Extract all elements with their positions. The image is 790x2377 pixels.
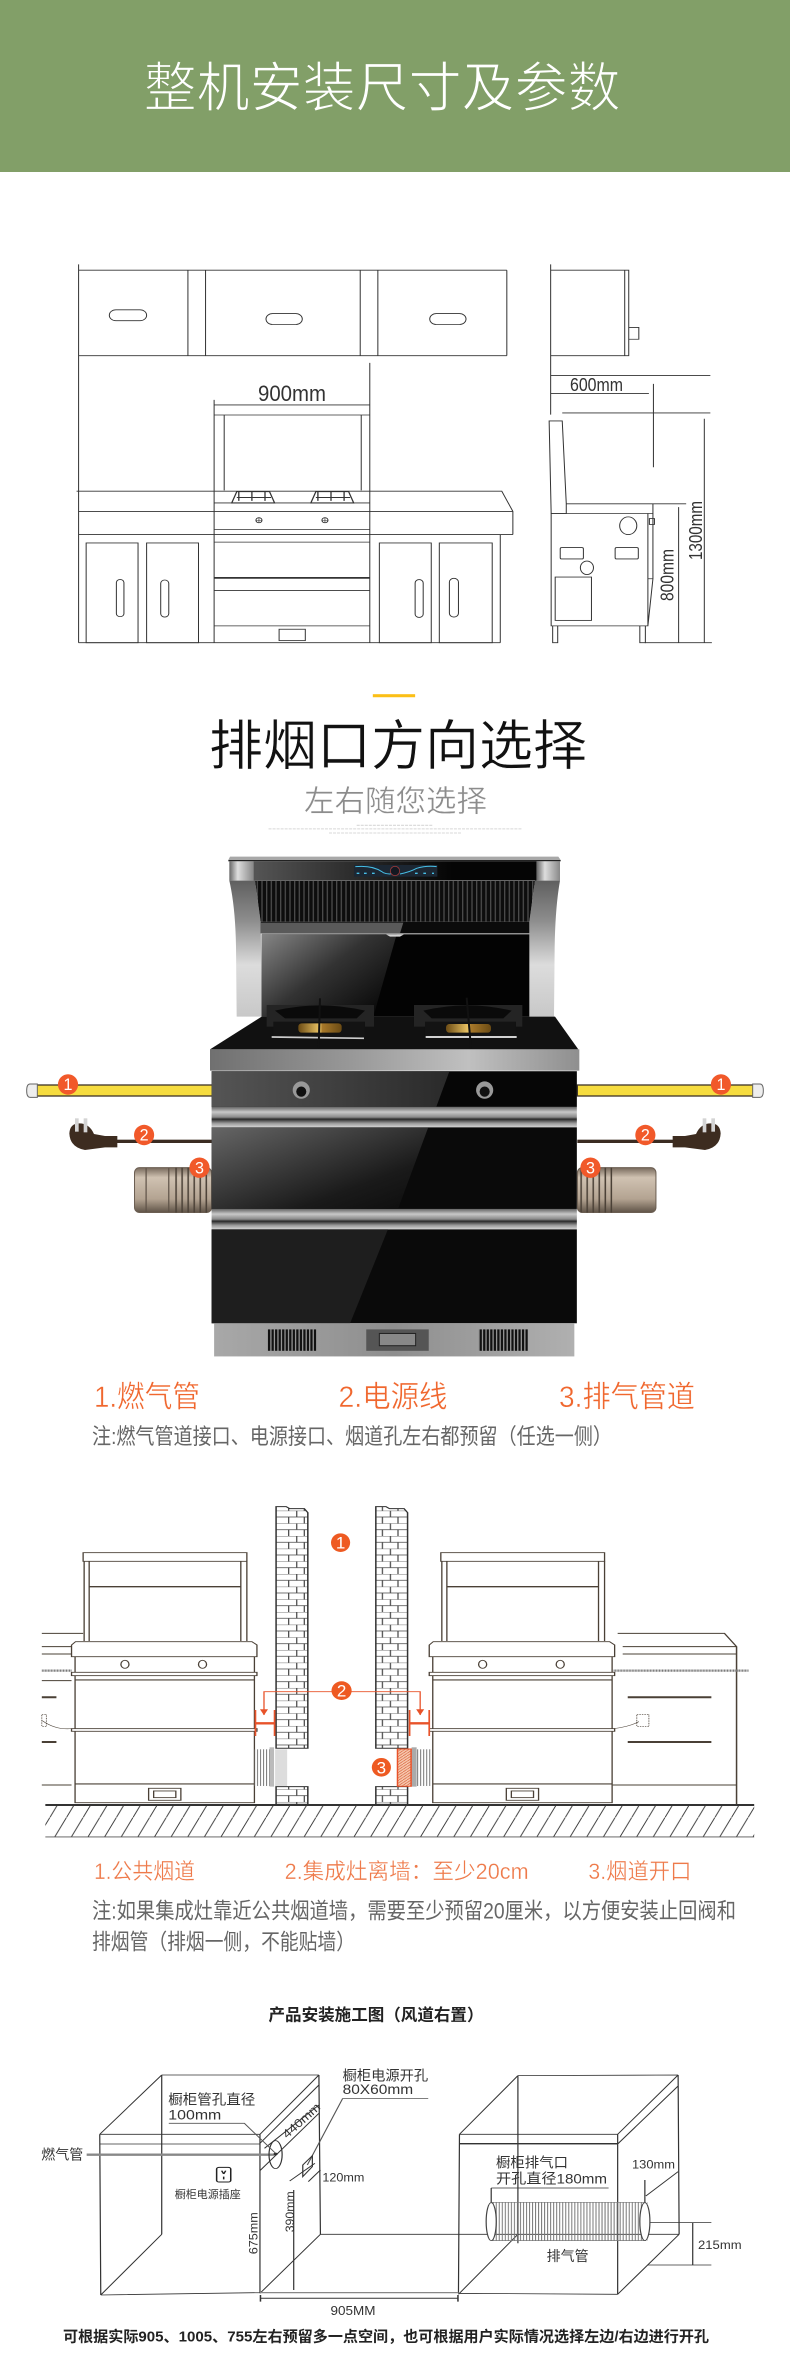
annotations: 100mm [168, 2106, 221, 2122]
left stove line drawing [72, 1553, 257, 1803]
flue opening [397, 1749, 411, 1786]
annotations: 橱柜电源开孔 [343, 2068, 428, 2084]
number badges: 2 [641, 1127, 650, 1145]
annotations: 橱柜电源插座 [175, 2187, 241, 2201]
plinth with vents [214, 1323, 574, 1356]
dimension labels: 900mm [258, 381, 326, 406]
annotations: 120mm [322, 2170, 364, 2184]
diagram title: 产品安装施工图（风道右置） [268, 2004, 484, 2024]
left cabinet wireframe [87, 2075, 428, 2295]
note: 注:燃气管道接口、电源接口、烟道孔左右都预留（任选一侧） [92, 1424, 612, 1449]
part labels: 1.燃气管 [94, 1381, 200, 1414]
annotations: 80X60mm [343, 2081, 413, 2097]
dimension labels: 600mm [570, 375, 623, 395]
annotations: 440mm [280, 2100, 323, 2141]
exhaust ducts [135, 1168, 656, 1213]
header band [0, 0, 790, 172]
labels: 1.公共烟道 [94, 1859, 195, 1884]
subheading: 左右随您选择 [304, 786, 487, 818]
annotations: 390mm [283, 2191, 297, 2232]
badge numbers: 1 [336, 1534, 345, 1553]
drawers [212, 1107, 577, 1323]
part labels: 2.电源线 [338, 1381, 448, 1414]
exhaust pipe [486, 2202, 650, 2241]
number badges [58, 1074, 731, 1178]
number badges: 3 [586, 1159, 595, 1177]
panel: installation dimension drawings [77, 264, 712, 643]
part labels [94, 1381, 695, 1414]
panel: wall clearance diagram [42, 1507, 754, 1837]
labels [94, 1859, 691, 1884]
number badges: 3 [195, 1159, 204, 1177]
dimension labels [258, 375, 706, 601]
dimension labels: 800mm [658, 549, 678, 601]
annotations: 排气管 [547, 2248, 589, 2264]
panel: exhaust direction section [27, 694, 763, 1356]
note: 排烟管（排烟一侧，不能贴墙） [92, 1929, 355, 1954]
number badges: 2 [140, 1127, 149, 1145]
front elevation drawing [77, 264, 513, 643]
orange clearance markers [255, 1692, 429, 1736]
number badges: 1 [64, 1076, 73, 1094]
annotations: 橱柜管孔直径 [168, 2092, 255, 2108]
annotations [41, 2068, 742, 2318]
neighbouring cabinets [42, 1633, 749, 1804]
exhaust ducts through wall [254, 1747, 432, 1787]
cooktop and burners [210, 998, 579, 1071]
heading: 排烟口方向选择 [209, 716, 587, 776]
number badges: 1 [716, 1076, 725, 1094]
accent bar and fine print [269, 694, 522, 833]
badge numbers: 2 [337, 1682, 346, 1701]
floor [45, 1805, 754, 1837]
note [92, 1898, 736, 1954]
labels: 2.集成灶离墙：至少20cm [285, 1859, 529, 1884]
footer note: 可根据实际905、1005、755左右预留多一点空间，也可根据用户实际情况选择左边/右边进行开孔 [63, 2327, 709, 2345]
control panel with knobs [212, 1071, 577, 1107]
annotations: 675mm [246, 2212, 260, 2254]
dimension labels: 1300mm [686, 501, 706, 560]
annotations: 130mm [632, 2158, 675, 2172]
part labels: 3.排气管道 [559, 1381, 695, 1414]
brick flue walls [276, 1507, 408, 1804]
badge numbers [336, 1534, 386, 1777]
panel: construction diagram [87, 2075, 711, 2302]
labels: 3.烟道开口 [588, 1859, 691, 1884]
right cabinet wireframe [260, 2075, 711, 2302]
annotations: 燃气管 [41, 2147, 83, 2163]
annotations: 215mm [698, 2238, 742, 2252]
gas pipe and power cord, left [27, 1084, 213, 1150]
badge numbers: 3 [377, 1758, 386, 1777]
right stove line drawing [429, 1553, 615, 1803]
annotations: 开孔直径180mm [496, 2171, 607, 2187]
range hood [228, 857, 561, 1017]
gas pipe and power cord, right [577, 1084, 763, 1150]
socket icon [217, 2167, 231, 2182]
badge discs [331, 1533, 391, 1777]
side elevation drawing [549, 264, 712, 643]
title: 整机安装尺寸及参数 [144, 58, 621, 118]
annotations: 橱柜排气口 [496, 2155, 568, 2171]
annotations: 905MM [330, 2303, 376, 2318]
